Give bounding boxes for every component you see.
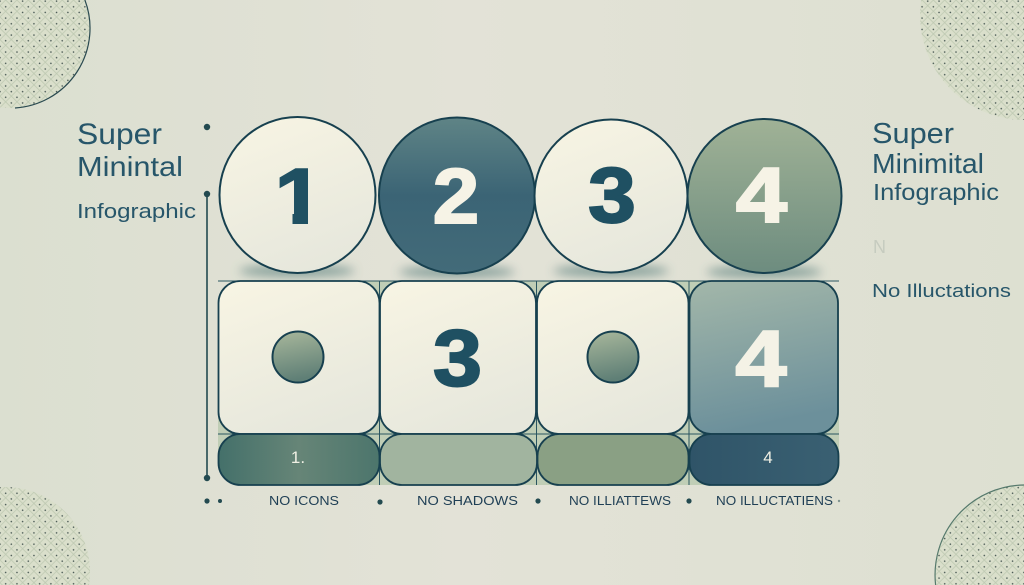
label: no illiattews: NO ILLIATTEWS	[569, 493, 671, 508]
right heading	[872, 118, 999, 205]
circle 4	[688, 119, 842, 273]
circle shadows	[239, 265, 822, 278]
left heading: Infographic	[77, 201, 196, 223]
card 2 with number 3	[380, 281, 536, 434]
circle 4: 4	[736, 153, 787, 239]
circle 2	[379, 118, 535, 274]
right heading: Minimital	[872, 148, 984, 179]
pill 1: 1.	[291, 448, 305, 467]
decoration: bottom-right dotted circle	[935, 485, 1024, 585]
circle 3: 3	[588, 153, 636, 239]
circle 3	[534, 120, 688, 272]
faint right note: N	[873, 237, 886, 257]
circle 1	[220, 117, 376, 273]
left heading	[77, 118, 196, 223]
card 3 with dot	[537, 281, 688, 434]
right heading: Infographic	[873, 179, 999, 205]
card 1 with dot	[218, 281, 380, 434]
decoration: top-left dotted circle	[0, 0, 90, 108]
pill 1	[218, 434, 380, 485]
pill 2	[380, 434, 537, 485]
pill 4	[690, 434, 838, 485]
left heading: Minintal	[77, 151, 183, 182]
circle 2: 2	[433, 153, 479, 240]
card 2 with number 3: 3	[433, 313, 482, 403]
pill 4: 4	[763, 448, 773, 467]
left heading: Super	[77, 118, 162, 151]
label: no shadows: NO SHADOWS	[417, 493, 518, 508]
circle 1: 1	[275, 152, 323, 240]
bottom dots	[204, 498, 840, 505]
grid backing	[218, 281, 839, 485]
decoration: top-right dotted circle	[920, 0, 1024, 120]
card 4 with number 4	[690, 281, 838, 434]
card 4 with number 4: 4	[735, 315, 787, 404]
left axis with dots	[204, 124, 210, 481]
right note: no illustrations: No Illuctations	[872, 281, 1011, 301]
decoration: bottom-left dotted circle	[0, 487, 90, 585]
pill 3	[538, 434, 688, 485]
right heading: Super	[872, 118, 954, 150]
label: no illuctatiens: NO ILLUCTATIENS	[716, 493, 833, 508]
label: no icons: NO ICONS	[269, 493, 339, 508]
